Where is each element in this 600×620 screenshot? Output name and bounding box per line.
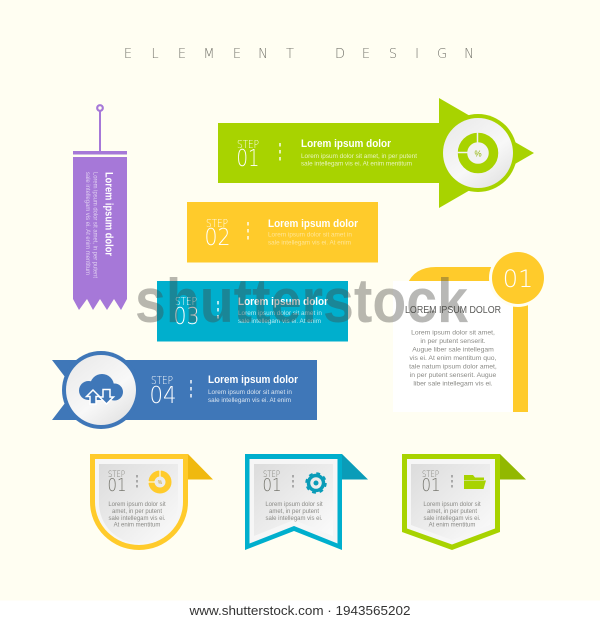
icon: folder: [464, 475, 486, 489]
icon: gear: [308, 474, 324, 492]
panel: yellow shield: Lorem ipsum dolor sit: [108, 502, 166, 508]
panel: step 04 blue ribbon: 04: [150, 383, 176, 409]
panel: step 02 yellow: Lorem ipsum dolor sit amet in: [268, 232, 353, 238]
panel: step 04 blue ribbon: Lorem ipsum dolor sit amet in: [208, 389, 293, 396]
panel: teal pennant: sale intellegam vis ei.: [265, 516, 323, 522]
number badge: 01: [503, 265, 533, 293]
banner text: sale intellegam vis ei. At enim mentitum: [84, 172, 91, 275]
banner text: [84, 172, 114, 278]
panel: green pentagon: sale intellegam vis ei.: [423, 516, 481, 522]
panel: step 03 teal: 03: [174, 304, 200, 330]
panel: step 03 teal: STEP: [175, 296, 197, 308]
panel: step 04 blue ribbon: sale intellegam vis ei. At enim: [208, 397, 291, 404]
panel: step 03 teal: Lorem ipsum dolor: [238, 296, 329, 308]
panel: green pentagon: STEP: [422, 470, 439, 480]
card text: Lorem ipsum dolor sit amet,: [411, 330, 495, 336]
panel: green pentagon: 01: [422, 475, 440, 496]
panel: green pentagon: At enim mentitum: [429, 522, 475, 528]
text block: [301, 138, 417, 168]
panel: yellow shield: At enim mentitum: [114, 522, 160, 528]
panel: step 03 teal: sale intellegam vis ei. At enim: [238, 318, 321, 325]
panel: green pentagon: Lorem ipsum dolor sit: [423, 502, 481, 508]
step label: [236, 139, 260, 172]
panel: step 02 yellow: Lorem ipsum dolor: [268, 218, 359, 230]
panel: step 04 blue ribbon: [52, 351, 317, 429]
panel: teal pennant: Lorem ipsum dolor sit: [265, 502, 323, 508]
panel: step 01 green arrow: [218, 98, 534, 208]
panel: yellow shield: amet, in per putent: [112, 509, 162, 515]
card text: vis ei. At enim mentitum quo,: [410, 355, 497, 362]
card text: LOREM IPSUM DOLOR: [405, 305, 501, 316]
step label: STEP: [237, 139, 259, 151]
footer url: www.shutterstock.com · 1943565202: [188, 603, 410, 618]
panel: green pentagon: amet, in per putent: [427, 509, 477, 515]
text block: Lorem ipsum dolor: [301, 138, 392, 150]
panel: teal pennant: amet, in per putent: [269, 509, 319, 515]
banner text: Lorem ipsum dolor sit amet, in per putent: [92, 172, 98, 278]
panel: yellow shield: 01: [108, 475, 126, 496]
banner text: Lorem ipsum dolor: [102, 172, 114, 257]
panel: purple hanging banner: [73, 105, 127, 310]
watermark: shutterstock: [135, 267, 468, 336]
icon: cloud with arrows: [79, 374, 123, 404]
panel: teal pennant: [245, 454, 368, 550]
card text: [405, 305, 501, 388]
panel: yellow shield: sale intellegam vis ei.: [108, 516, 166, 522]
number badge: [492, 252, 544, 304]
panel: step 02 yellow: STEP: [206, 218, 228, 230]
panel: yellow shield: [90, 454, 213, 550]
card text: in per putent senserit. Augue: [410, 372, 496, 379]
panel: yellow shield: STEP: [108, 470, 125, 480]
panel: step 04 blue ribbon: Lorem ipsum dolor: [208, 374, 299, 386]
step label: 01: [236, 146, 260, 172]
panel: teal pennant: STEP: [263, 470, 280, 480]
card text: liber sale intellegam vis ei.: [413, 380, 493, 388]
card text: Augue liber sale intellegam: [412, 346, 494, 354]
panel: step 03 teal: Lorem ipsum dolor sit amet in: [238, 310, 323, 317]
panel: teal pennant: 01: [262, 475, 282, 496]
icon: percent donut: [456, 131, 494, 168]
panel: step 02 yellow: sale intellegam vis ei. At enim: [268, 240, 351, 246]
card text: tale natum ipsum dolor amet,: [409, 364, 497, 370]
pin and rod: [97, 105, 103, 152]
title: ELEMENTDESIGN: [124, 47, 474, 62]
icon: percent donut: %: [474, 150, 482, 158]
card text: in per putent senserit.: [420, 338, 486, 345]
text block: Lorem ipsum dolor sit amet, in per putent: [301, 153, 417, 160]
panel: yellow bracket card: [393, 249, 547, 412]
panel: step 02 yellow: 02: [204, 225, 230, 251]
panel: green pentagon: [402, 454, 526, 550]
panel: step 02 yellow: [187, 202, 378, 262]
text block: sale intellegam vis ei. At enim mentitum: [301, 160, 412, 168]
panel: step 04 blue ribbon: STEP: [151, 375, 173, 387]
panel: step 03 teal: [157, 281, 348, 342]
icon: yellow donut: %: [158, 480, 163, 486]
